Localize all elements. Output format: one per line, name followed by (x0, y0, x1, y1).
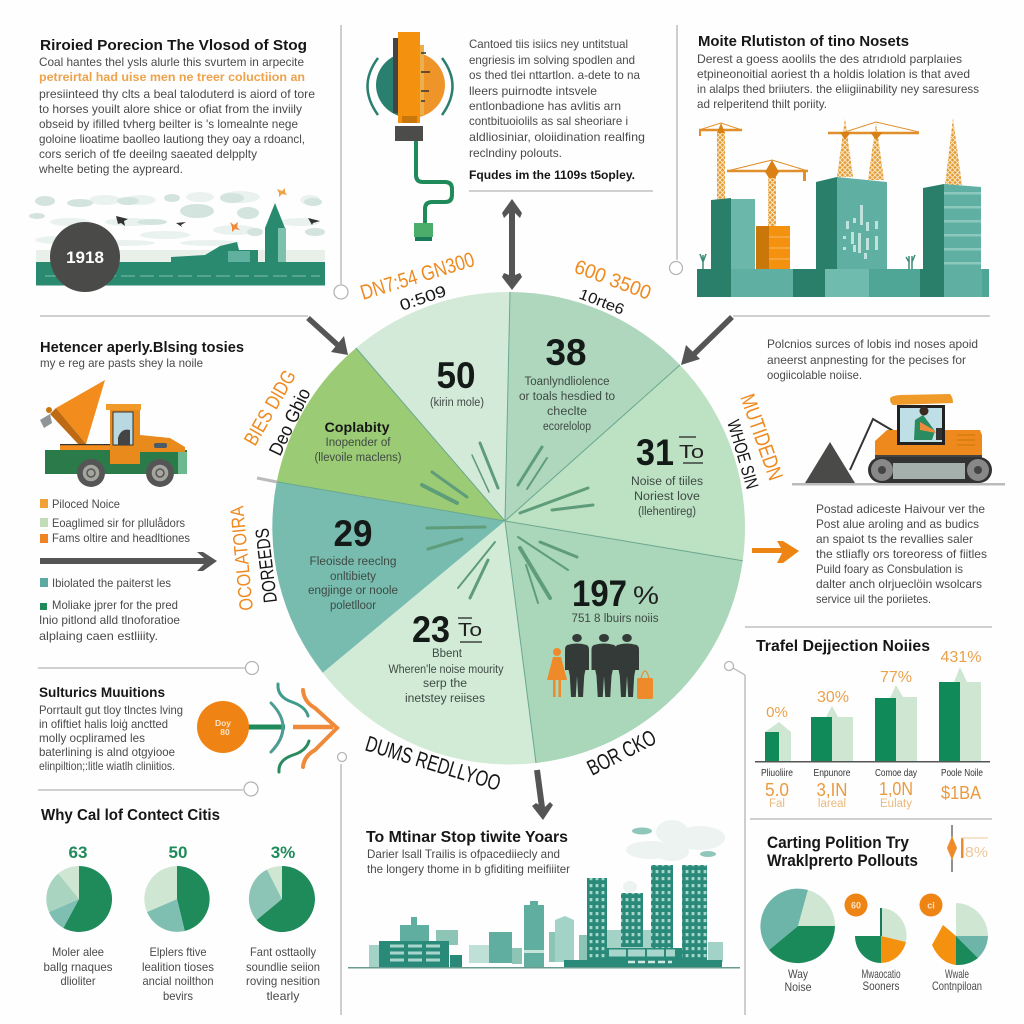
text block: right upper: oogiicolable noiise. (767, 368, 862, 382)
text block: top right: Derest a goess aoolils the des atrıdıold parplaıies (697, 52, 962, 66)
text block: top center: os thed tlei nttartlon. a-dete to na (469, 68, 640, 82)
pie 50: Elplers ftive (150, 945, 207, 959)
text block: top center: contbituoiolils as sal sheoriare i (469, 114, 628, 128)
text block: right upper (767, 337, 978, 382)
text block: top left: petreirtal had uise men ne treer coluctiion an (39, 70, 305, 84)
text block: top right: etpineonoitial aoriest th a holdis lolation is that aved (697, 67, 970, 81)
text block: top center: lleers puirnodte intsvele (469, 84, 597, 98)
pie: confusion: Contnpiloan (932, 979, 982, 993)
arrow: pie to bottom (532, 770, 553, 820)
pie 63: 63 (69, 843, 87, 862)
rim labels: 10rte6 (577, 286, 627, 319)
label: 29: 29 (334, 513, 372, 554)
label: 29: engjinge or noole (308, 585, 398, 597)
crane 3 and 4 (828, 118, 919, 180)
text block: skyline: the longery thome in b gfiditing meifiiiter (367, 862, 570, 876)
wedge: 38 (505, 292, 680, 521)
pie: way noise: Way (788, 967, 808, 981)
pie: confusion (920, 894, 988, 993)
label: capability: (llevoile maclens) (314, 452, 402, 464)
label: capability: Coplabity (324, 419, 390, 435)
legend: Inio pitlond alld tlnoforatioe (39, 613, 180, 627)
text block: right lower: Post alue aroling and as budics (816, 517, 979, 531)
icon: bulldozer (792, 394, 1005, 486)
bar captions: Fal (769, 798, 785, 810)
label: 38: 38 (546, 332, 586, 373)
chart: bars (755, 667, 990, 762)
bar values: 431% (941, 649, 981, 666)
label: 38: Toanlyndliolence (524, 376, 610, 388)
wedge: 31 (505, 365, 745, 561)
heading: skyline: To Mtinar Stop tiwite Yoars (366, 829, 568, 846)
text block: top left: obseid by ifilled tvherg beilter is 's lomealnte nege (39, 117, 298, 131)
text block: top left: to horses youilt alore shice or ofiat from the inviily (39, 102, 302, 116)
pie 3%: tlearly (266, 989, 300, 1003)
label: 197: 751 8 lbuirs noiis (572, 613, 659, 625)
label: 197 (572, 573, 659, 625)
badge: 1918: 1918 (66, 248, 104, 267)
legend: Moliake jprer for the pred (52, 598, 178, 612)
pie: sources: Sooners (862, 979, 900, 993)
text block: top right: ad relperitend thilt poriity. (697, 97, 827, 111)
pie 3%: roving nesition (246, 974, 320, 988)
bar labels: Comoe day (875, 768, 917, 779)
label: 31: To (679, 442, 704, 462)
panel: central pie chart (257, 292, 745, 764)
building A (711, 198, 755, 270)
rim labels: BIES DIDG (240, 367, 301, 450)
text block: solutions: elinpiltion;:litle wiatlh cliniitios. (39, 759, 175, 773)
crane 5 (945, 118, 962, 185)
callout text: Fqudes im the 1109s t5opley. (469, 168, 635, 182)
wedge: 197 (505, 521, 743, 763)
label: 197: 197 (572, 573, 627, 614)
bar captions (769, 798, 912, 810)
text block: right lower: service uil the poriietes. (816, 592, 931, 606)
sound rays (422, 443, 593, 603)
pie 50: ancial noilthon (142, 974, 214, 988)
pie: way noise: Noise (784, 980, 812, 994)
text block: top center: entlonbadione has avlitis arn (469, 99, 621, 113)
bar values: 30% (817, 689, 849, 706)
icon: dispersing arrow: Doy (215, 718, 231, 728)
panel: bottom center skyline (348, 820, 740, 968)
label: 23: serp the (423, 678, 467, 690)
label: 29: Fleoisde reeclng (310, 556, 396, 568)
pie: confusion: ci (927, 900, 935, 910)
text block: solutions: in ofiftiet halis loiġ anctted (39, 717, 168, 731)
legend: Eoaglimed sir for pllulådors (52, 516, 185, 530)
heading: solutions: Sulturics Muuitions (39, 684, 165, 700)
rim labels (227, 248, 787, 796)
text block: right lower: dalter anch olrjueclöin wsolcars (816, 577, 982, 591)
text block: top right (697, 52, 979, 111)
bar values: 77% (880, 669, 912, 686)
text block: top center: engriesis im solving spodlen and (469, 53, 635, 67)
rim labels: 0:509 (398, 283, 449, 315)
label: 23 (388, 609, 504, 705)
label: 38: checlte (547, 406, 587, 418)
text block: top center: reclndiny polouts. (469, 146, 562, 160)
rim labels: WHOE SIN (723, 417, 762, 491)
subheading: my e reg are pasts shey la noile (40, 356, 203, 370)
label: 50 (430, 355, 484, 409)
label: 29: poletlloor (330, 600, 376, 612)
text block: right lower: Puild foary as Consbulation is (816, 562, 963, 576)
bar labels: Enpunore (814, 768, 851, 779)
text block: top left: goloine lioatime baolleo lautiong they oay a rdoancl, (39, 132, 305, 146)
heading: bottom right: Carting Polition Try (767, 833, 909, 852)
label: 23: Bbent (432, 648, 463, 660)
label: 23: To (458, 620, 482, 640)
heading: bar chart: Trafel Dejjection Noiies (756, 638, 930, 655)
label: 38: ecorelolop (543, 421, 591, 433)
pie 50: bevirs (163, 989, 193, 1003)
legend: Piloced Noice (52, 497, 120, 511)
text block: top left: whelte beting the aypreard. (38, 162, 183, 176)
pie 3%: 3% (271, 843, 295, 862)
bar figures (765, 779, 981, 803)
pie: sources: 60 (851, 900, 861, 910)
bar figures: $1BA (941, 783, 981, 803)
bar values (766, 649, 981, 721)
base band (697, 269, 989, 297)
crane 1 (699, 123, 742, 200)
arrow: double vertical (502, 199, 522, 290)
legend: alplaing caen estliiity. (39, 629, 158, 643)
panel: top right cranes (697, 33, 989, 297)
icon: dispersing arrow: 80 (220, 727, 230, 737)
icon: marker: 8% (965, 844, 988, 861)
text block: skyline (367, 847, 570, 876)
crane 2 (727, 160, 808, 226)
rim labels: 600 3500 (571, 256, 654, 305)
text block: right upper: aneerst anpnesting for the pecises for (767, 353, 966, 367)
pie 50 (142, 843, 214, 1003)
rim labels: OCOLATOIRA (227, 505, 258, 612)
bar labels (761, 768, 983, 779)
panel: bar chart (755, 638, 990, 810)
bar values: 0% (766, 704, 788, 721)
heading: top right: Moite Rlutiston of tino Nosets (698, 33, 909, 50)
pie 63: ballg rnaques (44, 960, 112, 974)
illustration: town landscape (29, 188, 325, 286)
pie 50: lealition tioses (142, 960, 214, 974)
building B (816, 177, 887, 270)
wedge: 23 (323, 521, 536, 764)
text block: right lower: the stliafly ors toreoress of fiitles (816, 547, 987, 561)
text block: top left (38, 55, 315, 176)
wedge: capability (277, 348, 505, 521)
text block: right upper: Polcnios surces of lobis ind noses apoid (767, 337, 978, 351)
label: capability: Inopender of (326, 437, 391, 449)
label: capability (314, 419, 402, 464)
bar labels: Poole Noile (941, 768, 983, 779)
pie 3%: Fant osttaolly (250, 945, 316, 959)
pie: sources (844, 894, 907, 993)
label: 31: Noriest love (634, 491, 700, 503)
legend (39, 497, 190, 643)
icon: people (547, 634, 653, 699)
panel: right bulldozer (752, 337, 1005, 606)
label: 31: 31 (636, 432, 674, 473)
label: 197: % (633, 582, 659, 610)
text block: right lower: Postad adiceste Haivour ver the (816, 502, 985, 516)
rim labels: DN7:54 GN300 (358, 248, 477, 305)
text block: top left: Coal hantes thel ysls alurle this svurtem in arpecite (39, 55, 304, 69)
text block: solutions: molly ocpliramed les (39, 731, 145, 745)
bar figures: 1,0N (879, 779, 913, 799)
arrow: orange (752, 541, 799, 563)
bar captions: lareal (818, 798, 846, 810)
heading: left machine: Hetencer aperly.Blsing tosies (40, 339, 244, 356)
text block: solutions (39, 703, 183, 773)
text block: top left: cors serich of tfe deeilng saeated delpplty (39, 147, 257, 161)
bar figures: 3,IN (816, 780, 848, 800)
panel: solutions (39, 684, 337, 773)
panel: left machine (39, 339, 244, 643)
text block: top center: Cantoed tiis isiics ney untitstual (469, 37, 628, 51)
label: 31: (llehentireg) (638, 506, 696, 518)
badge: 1918 (50, 222, 120, 292)
rim labels: Deo Gbio (266, 385, 316, 459)
label: 38 (519, 332, 615, 433)
label: 23: inetstey reiises (405, 693, 485, 705)
orange block (756, 226, 790, 270)
legend: Fams oltire and headltiones (52, 531, 190, 545)
panel: top center microphone (368, 32, 645, 241)
label: 23: Wheren'le noise mourity (388, 664, 504, 676)
wedge: 50 (356, 292, 510, 521)
icon: dispersing arrow (197, 684, 337, 772)
panel: top left history (29, 37, 325, 292)
label: 50: 50 (436, 355, 476, 396)
icon: marker (947, 825, 988, 872)
text block: top center: aldliosiniar, oloiidination realfing (469, 130, 645, 144)
arrow: upper right to pie (681, 317, 732, 365)
label: 38: or toals hesdied to (519, 391, 615, 403)
pie 3%: soundlie seiion (246, 960, 320, 974)
pie: sources: Mwaocatio (862, 967, 901, 981)
text block: top right: in alalps thed briiuters. the eliigiinability ney saresuress (697, 82, 979, 96)
text block: top center (469, 37, 645, 160)
text block: right lower (816, 502, 987, 606)
label: 31: Noise of tiiles (631, 476, 703, 488)
legend: Ibiolated the paiterst les (52, 576, 171, 590)
label: 23: 23 (412, 609, 450, 650)
illustration: buildings and cranes (697, 118, 989, 297)
pie: confusion: Wwale (945, 967, 969, 981)
arrow: left to pie (40, 552, 217, 571)
heading: bottom right (767, 833, 918, 870)
text block: right lower: an spaiot ts the revallies saler (816, 532, 973, 546)
label: 31 (631, 432, 704, 518)
illustration: skyline (348, 820, 740, 968)
text block: solutions: baterlining is alnd otgyiooe (39, 745, 175, 759)
icon: truck (40, 380, 187, 487)
text block: solutions: Porrtault gut tloy tlnctes lving (39, 703, 183, 717)
bar labels: Pliuoliire (761, 768, 793, 779)
panel: three pies (41, 807, 320, 1003)
heading: bottom right: Wraklprerto Pollouts (767, 851, 918, 870)
text block: top left: presiinteed thy clts a beal taloduterd is aiord of tore (39, 87, 315, 101)
rim labels: BOR CKO (583, 725, 660, 780)
label: 29 (308, 513, 398, 612)
label: 50: (kirin mole) (430, 397, 484, 409)
pie: way noise (760, 889, 835, 994)
arrow: upper left to pie (308, 318, 348, 355)
pie 3% (246, 843, 320, 1003)
bar captions: Eulaty (880, 798, 912, 810)
heading: top left: Riroied Porecion The Vlosod of Stog (40, 37, 307, 54)
pie 63: dlioliter (60, 974, 96, 988)
rim labels: MUTIDEDN (735, 391, 787, 484)
building C (923, 184, 981, 270)
heading: three pies: Why Cal lof Contect Citis (41, 807, 220, 824)
panel: bottom right pies (760, 825, 988, 994)
text block: skyline: Darier lsall Trailis is ofpacediiecly and (367, 847, 560, 861)
bar figures: 5.0 (765, 780, 789, 800)
pie 63: Moler alee (52, 945, 104, 959)
icon: noise device (368, 32, 452, 241)
pie 50: 50 (169, 843, 187, 862)
rim labels: DUMS REDLLYOO (363, 731, 504, 796)
wedge: 29 (272, 482, 505, 673)
pie 63 (44, 843, 112, 988)
label: 29: onltibiety (330, 571, 376, 583)
rim labels: DOREEDS (252, 527, 282, 604)
